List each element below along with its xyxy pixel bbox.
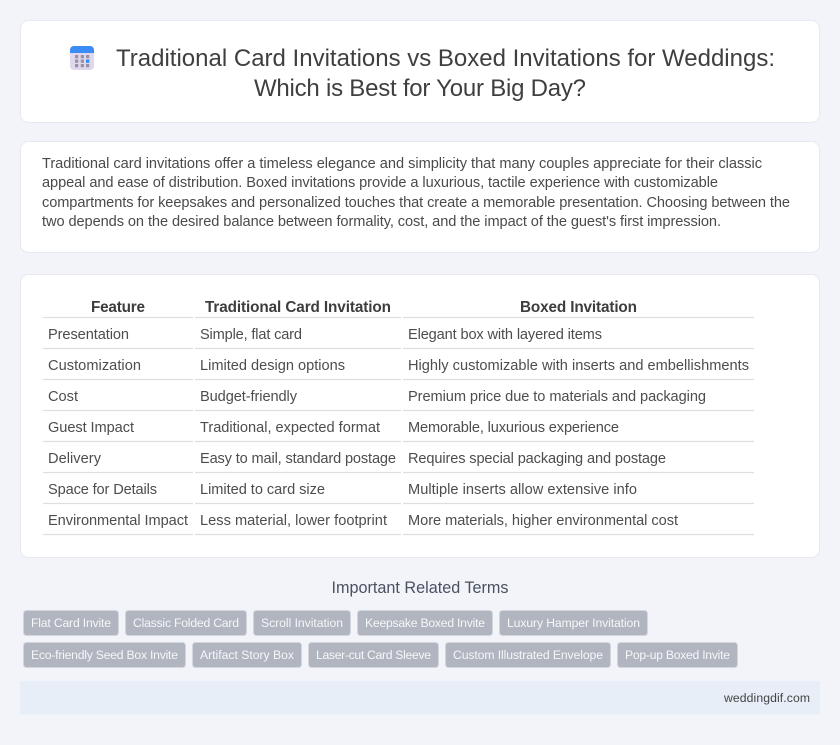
footer source text: weddingdif.com [723,691,810,705]
row: environmental impact: Less material, lower footprint [200,513,387,529]
related terms heading: Important Related Terms [332,579,508,597]
row: guest impact: Guest Impact [48,420,134,436]
chip: custom illustrated envelope [446,642,610,668]
chip: luxury hamper invitation [500,610,648,636]
icon: calendar [70,46,94,70]
row: space for details: Multiple inserts allow extensive info [408,482,637,498]
row: cost [48,389,706,405]
row: delivery: Delivery [48,451,102,467]
chip: artifact story box: Artifact Story Box [200,648,294,662]
row: environmental impact: Environmental Impact [48,513,188,529]
chip: scroll invitation: Scroll Invitation [261,616,343,630]
intro paragraph: appeal and ease of distribution. Boxed invitations provide a luxurious, tactile experience with customizable [42,175,718,191]
chip: luxury hamper invitation: Luxury Hamper Invitation [507,616,640,630]
row: guest impact: Traditional, expected format [200,420,380,436]
row: delivery [48,451,666,467]
header panel [20,20,820,122]
chip: pop-up boxed invite: Pop-up Boxed Invite [625,648,730,662]
comparison table panel [20,274,820,558]
row: space for details: Limited to card size [200,482,325,498]
chip: laser-cut card sleeve [308,642,438,668]
row: cost: Cost [48,389,78,405]
chip: classic folded card: Classic Folded Card [133,616,239,630]
row: delivery: Requires special packaging and postage [408,451,666,467]
row: environmental impact [48,513,678,529]
row: cost: Budget-friendly [200,389,298,405]
row: customization: Limited design options [200,358,345,374]
chip: laser-cut card sleeve: Laser-cut Card Sleeve [316,648,431,662]
row: cost: Premium price due to materials and packaging [408,389,706,405]
row: customization [48,358,749,374]
chip: custom illustrated envelope: Custom Illustrated Envelope [453,648,603,662]
chip: artifact story box [192,642,302,668]
chip: flat card invite: Flat Card Invite [31,616,111,630]
intro paragraph: compartments for keepsakes and personalized touches that create a memorable presentation. Choosing between the [42,195,790,211]
intro paragraph [42,156,790,230]
chip: scroll invitation [254,610,350,636]
chip: flat card invite [24,610,118,636]
row: customization: Highly customizable with inserts and embellishments [408,358,749,374]
row: presentation: Presentation [48,327,129,343]
chip: eco-friendly seed box invite: Eco-friendly Seed Box Invite [31,648,178,662]
table header: Feature [91,299,145,316]
chip: pop-up boxed invite [618,642,738,668]
footer bar [20,681,820,714]
chip: classic folded card [126,610,246,636]
row: presentation: Elegant box with layered items [408,327,602,343]
table header: Traditional Card Invitation [205,299,391,316]
table header [91,299,637,316]
row: space for details: Space for Details [48,482,157,498]
row: delivery: Easy to mail, standard postage [200,451,396,467]
title [116,45,775,102]
title: Which is Best for Your Big Day? [254,75,586,102]
row: presentation: Simple, flat card [200,327,302,343]
row: environmental impact: More materials, higher environmental cost [408,513,678,529]
intro text panel [20,142,820,252]
row: guest impact: Memorable, luxurious experience [408,420,619,436]
intro paragraph: Traditional card invitations offer a timeless elegance and simplicity that many couples appreciate for their classic [42,156,762,172]
table grid lines [43,318,754,534]
related terms chips [24,610,738,668]
row: presentation [48,327,602,343]
table header: Boxed Invitation [520,299,637,316]
chip: keepsake boxed invite [358,610,492,636]
intro paragraph: two depends on the desired balance between formality, cost, and the impact of the guest's first impression. [42,214,721,230]
chip: eco-friendly seed box invite [24,642,186,668]
chip: keepsake boxed invite: Keepsake Boxed Invite [365,616,485,630]
row: space for details [48,482,637,498]
row: guest impact [48,420,619,436]
title: Traditional Card Invitations vs Boxed Invitations for Weddings: [116,45,775,72]
row: customization: Customization [48,358,141,374]
